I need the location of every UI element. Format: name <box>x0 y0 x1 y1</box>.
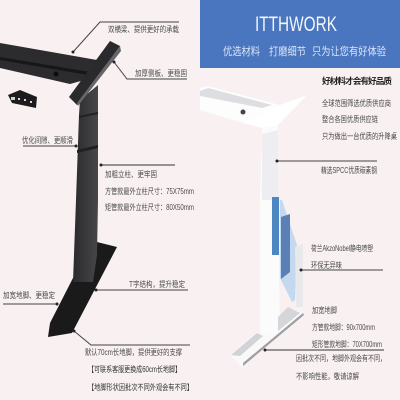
callout: wide white foot <box>264 305 386 381</box>
callout: thicker column <box>100 164 194 212</box>
callout: AkzoNobel coating: 环保无异味 <box>311 260 342 270</box>
callout: optimized gap <box>22 135 78 148</box>
banner slogan <box>223 44 386 58</box>
white crossbeam <box>200 86 280 123</box>
text block: good materials: 整合各国优质供应链 <box>322 114 378 124</box>
callout: 70cm foot <box>72 330 193 392</box>
white column <box>260 125 280 335</box>
callout: wide white foot: 加宽地脚 <box>312 305 337 315</box>
callout: 70cm foot: 默认70cm长地脚，提供更好的支撑 <box>85 347 182 357</box>
callout: double beam <box>72 22 179 54</box>
callout: wider foot <box>3 290 58 306</box>
callout: 70cm foot: 【可联系客服更换成60cm长地脚】 <box>88 364 181 374</box>
banner slogan: 优选材料 <box>223 44 260 58</box>
callout: optimized gap: 优化间隙、更顺滑 <box>22 135 73 145</box>
callout: thicker column: 矩管款最外立柱尺寸：80X50mm <box>105 202 194 212</box>
control panel icon <box>8 90 37 108</box>
callout: AkzoNobel coating <box>300 243 383 272</box>
white foot <box>230 307 304 368</box>
callout: wider foot: 加宽地脚、更稳定 <box>3 290 55 300</box>
black foot <box>48 242 117 337</box>
callout: SPCC steel: 精选SPCC优质碳素钢 <box>321 165 377 175</box>
callout: thicker column: 加粗立柱、更牢固 <box>105 169 157 179</box>
blue cutaway section <box>280 200 297 302</box>
text block: good materials: 好材料才会有好品质 <box>322 75 392 86</box>
black crossbeam <box>0 43 97 84</box>
callout: thick side plate: 加厚侧板、更稳固 <box>135 68 187 78</box>
callout: double beam: 双横梁、提供更好的承载 <box>108 24 179 34</box>
black desk frame <box>0 41 121 337</box>
callout: thicker column: 方管款最外立柱尺寸：75X75mm <box>105 186 194 196</box>
callout: thick side plate <box>112 60 187 79</box>
white top plate <box>243 95 307 128</box>
black column <box>73 85 98 282</box>
banner slogan: 只为让您有好体验 <box>312 44 386 58</box>
callout: SPCC steel <box>276 160 377 175</box>
callout: wide white foot: 不影响性能，敬请谅解 <box>296 371 359 381</box>
callout: T structure <box>94 279 188 292</box>
text block: good materials <box>322 75 397 141</box>
brand title: ITTHWORK <box>255 13 337 36</box>
black side plate <box>69 41 120 105</box>
callout: T structure: T字结构，提升稳定 <box>129 279 185 289</box>
header banner <box>200 0 400 68</box>
callout: 70cm foot: 【地脚形状因批次不同外观会有不同】 <box>88 382 193 392</box>
banner slogan: 打磨细节 <box>269 44 306 58</box>
callout: AkzoNobel coating: 荷兰AkzoNobel静电喷塑 <box>311 243 373 253</box>
callout: wide white foot: 方管款地脚：90x700mm <box>312 322 375 332</box>
white desk frame <box>200 86 307 368</box>
